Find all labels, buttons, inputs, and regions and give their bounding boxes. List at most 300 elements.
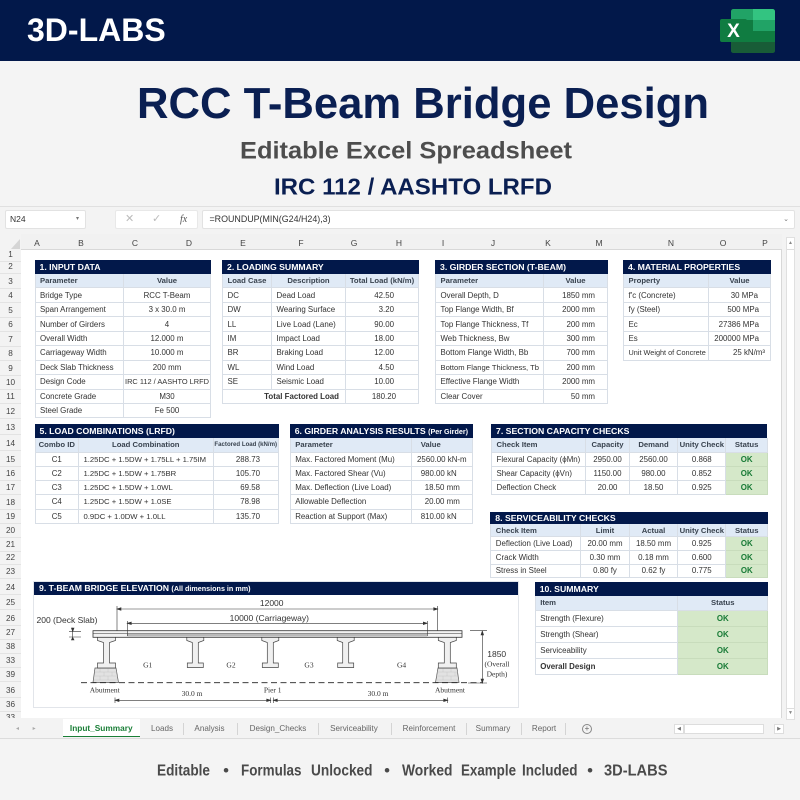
- load combinations table: 1.25DC + 1.5DW + 1.75LL + 1.75IM: [84, 455, 206, 464]
- panel: 1. input data: [35, 260, 211, 418]
- dimension labels: 12000: [260, 598, 284, 608]
- heading: 10. SUMMARY: [540, 584, 599, 594]
- capacity table: 18.50: [644, 483, 663, 492]
- formula text: ⌄: [783, 216, 789, 223]
- dimension labels: 1850: [487, 649, 506, 659]
- row headers: [0, 250, 21, 718]
- capacity table: Deflection Check: [496, 483, 556, 492]
- column headers: A: [34, 238, 40, 248]
- girder table: 50 mm: [571, 392, 595, 401]
- capacity table: Shear Capacity (ϕVn): [496, 469, 572, 478]
- row headers: 23: [6, 567, 15, 576]
- column headers: M: [595, 238, 603, 248]
- serviceability table: Deflection (Live Load): [496, 539, 573, 548]
- drawing annotations: 30.0 m: [368, 689, 389, 698]
- drawing annotations: Abutment: [90, 686, 121, 694]
- tab: Analysis: Analysis: [194, 724, 225, 733]
- footer tagline: •: [384, 762, 390, 780]
- deck slab: [93, 631, 462, 637]
- loading table: Impact Load: [276, 334, 320, 343]
- row headers: 7: [8, 334, 13, 344]
- column headers: [21, 234, 782, 250]
- load combinations table: C4: [52, 497, 62, 506]
- column headers: O: [720, 238, 726, 248]
- capacity table: 0.925: [692, 483, 712, 492]
- loading table: IM: [228, 334, 236, 343]
- column headers: P: [762, 238, 768, 248]
- formula text: =ROUNDUP(MIN(G24/H24),3): [210, 214, 331, 224]
- load combinations table: 69.58: [240, 483, 260, 492]
- heading: 4. MATERIAL PROPERTIES: [628, 262, 740, 272]
- heading: [490, 512, 768, 524]
- footer tagline: Formulas: [241, 762, 302, 780]
- input data table: M30: [159, 392, 175, 401]
- serviceability table: 18.50 mm: [636, 539, 671, 548]
- footer tagline: Editable: [157, 762, 210, 780]
- girder table: Bottom Flange Thickness, Tb: [440, 363, 539, 372]
- row headers: 8: [8, 349, 13, 358]
- girder table: Top Flange Thickness, Tf: [440, 320, 528, 329]
- footer tagline: Included: [522, 762, 578, 780]
- footer tagline: •: [223, 762, 229, 780]
- name box: N24: [10, 214, 26, 224]
- girder table: 1850 mm: [562, 291, 595, 300]
- title: RCC T-Beam Bridge Design: [137, 79, 709, 128]
- summary table: Strength (Flexure): [540, 614, 604, 623]
- capacity table: Flexural Capacity (ϕMn): [496, 455, 580, 464]
- panel: 9. bridge elevation: [34, 582, 518, 707]
- capacity table: Demand: [638, 440, 669, 449]
- worksheet area: [21, 250, 782, 718]
- material table: Value: [729, 276, 750, 285]
- loading table: DC: [228, 291, 239, 300]
- capacity table: 980.00: [641, 469, 666, 478]
- row headers: 6: [8, 320, 13, 329]
- heading: (All dimensions in mm): [171, 584, 250, 593]
- row headers: 24: [6, 583, 15, 592]
- girder table: Effective Flange Width: [440, 377, 519, 386]
- row headers: 36: [6, 700, 15, 709]
- loading table: WL: [228, 363, 239, 372]
- column headers: N: [668, 238, 674, 248]
- panel: 8. serviceability checks: [490, 512, 768, 578]
- footer tagline: 3D-LABS: [604, 762, 668, 780]
- logo: 3D-LABS: 3D-LABS: [27, 12, 166, 48]
- row headers: 26: [6, 614, 15, 623]
- formula bar: [5, 210, 795, 229]
- analysis table: [290, 438, 473, 524]
- input data table: 4: [165, 320, 169, 329]
- analysis table: Max. Factored Shear (Vu): [295, 469, 386, 478]
- material table: Es: [628, 334, 638, 343]
- dimension labels: 200 (Deck Slab): [37, 615, 98, 625]
- girder table: 200 mm: [566, 363, 595, 372]
- analysis table: 810.00 kN: [421, 512, 457, 521]
- drawing annotations: G4: [397, 660, 406, 670]
- heading: (Per Girder): [428, 427, 468, 436]
- load combinations table: 135.70: [236, 512, 260, 521]
- column headers: K: [545, 238, 551, 248]
- girder table: Web Thickness, Bw: [440, 334, 510, 343]
- loading table: 180.20: [372, 392, 396, 401]
- capacity table: 2950.00: [593, 455, 622, 464]
- summary table: Overall Design: [540, 662, 595, 671]
- serviceability table: 0.80 fy: [593, 566, 617, 575]
- vertical scrollbar: ▼: [788, 710, 793, 716]
- serviceability table: Check Item: [496, 526, 537, 535]
- input data table: 200 mm: [153, 363, 181, 372]
- girder table: Top Flange Width, Bf: [440, 305, 514, 314]
- capacity table: [491, 438, 767, 495]
- tab: Serviceability: Serviceability: [330, 724, 378, 733]
- formula text: [202, 210, 795, 229]
- panel: 4. material properties: [623, 260, 771, 361]
- horizontal scrollbar: ▶: [777, 726, 781, 732]
- drawing annotations: G1: [143, 660, 153, 670]
- drawing annotations: G2: [226, 660, 236, 670]
- serviceability table: 0.600: [692, 553, 712, 562]
- capacity table: OK: [741, 483, 753, 492]
- heading: 2. LOADING SUMMARY: [227, 262, 324, 272]
- load combinations table: Factored Load (kN/m): [214, 441, 277, 448]
- input data table: Number of Girders: [40, 320, 105, 329]
- tab: Loads: Loads: [151, 724, 173, 733]
- capacity table: Capacity: [591, 440, 624, 449]
- row headers: 3: [8, 276, 13, 286]
- analysis table: Parameter: [295, 440, 333, 449]
- girder table: Clear Cover: [440, 392, 483, 401]
- serviceability table: 0.775: [692, 566, 712, 575]
- input data table: Value: [157, 276, 177, 285]
- girder table: 200 mm: [566, 320, 595, 329]
- heading: 5. LOAD COMBINATIONS (LRFD): [40, 426, 175, 436]
- girder table: Parameter: [440, 276, 478, 285]
- dimension labels: [37, 598, 506, 659]
- spreadsheet window: [0, 206, 800, 739]
- abutments: [93, 668, 459, 682]
- dimension lines: [69, 606, 487, 703]
- heading: 7. SECTION CAPACITY CHECKS: [496, 426, 629, 436]
- loading table: Seismic Load: [276, 377, 324, 386]
- input data table: Fe 500: [155, 406, 179, 415]
- function buttons: ✓: [152, 213, 161, 225]
- row headers: 10: [6, 378, 15, 387]
- bridge elevation drawing: [36, 598, 510, 703]
- input data table: 10.000 m: [151, 348, 183, 357]
- load combinations table: Combo ID: [39, 440, 75, 449]
- input data table: Design Code: [40, 377, 86, 386]
- row headers: 14: [6, 439, 15, 448]
- loading table: Wearing Surface: [276, 305, 335, 314]
- capacity table: Unity Check: [680, 440, 724, 449]
- name box: ▾: [76, 216, 79, 222]
- analysis table: 18.50 mm: [425, 483, 460, 492]
- drawing annotations: G3: [304, 660, 314, 670]
- loading table: Total Factored Load: [264, 392, 339, 401]
- serviceability table: OK: [741, 566, 753, 575]
- heading: [222, 260, 419, 274]
- material table: 25 kN/m³: [733, 348, 765, 357]
- serviceability table: 0.62 fy: [642, 566, 665, 575]
- column headers: I: [442, 238, 444, 248]
- tab: Design_Checks: Design_Checks: [250, 724, 306, 733]
- row headers: 18: [6, 498, 15, 507]
- panel: 5. load combinations: [35, 424, 279, 524]
- material table: 200000 MPa: [714, 334, 759, 343]
- input data table: Span Arrangement: [40, 305, 106, 314]
- row headers: 5: [8, 306, 13, 314]
- load combinations table: [34, 438, 279, 524]
- column headers: B: [78, 238, 84, 248]
- load combinations table: 78.98: [240, 497, 260, 506]
- serviceability table: Actual: [642, 526, 665, 535]
- capacity table: 2560.00: [639, 455, 668, 464]
- sheet tab navigation arrows: ◂ ▸: [16, 726, 36, 732]
- drawing annotations: 30.0 m: [182, 689, 203, 698]
- analysis table: Value: [421, 440, 441, 449]
- input data table: Bridge Type: [40, 291, 82, 300]
- load combinations table: 1.25DC + 1.5DW + 1.0SE: [84, 497, 172, 506]
- loading table: BR: [228, 348, 238, 357]
- material table: [623, 274, 771, 361]
- capacity table: 0.868: [692, 455, 712, 464]
- loading table: SE: [228, 377, 238, 386]
- icon: Excel logo: X: [727, 21, 740, 42]
- row headers: 4: [8, 291, 13, 300]
- vertical scrollbar: ▲: [788, 240, 793, 246]
- analysis table: Max. Deflection (Live Load): [295, 483, 391, 492]
- input data table: Concrete Grade: [40, 392, 96, 401]
- serviceability table: OK: [741, 553, 753, 562]
- material table: Property: [628, 276, 660, 285]
- summary table: OK: [717, 630, 729, 639]
- input data table: Steel Grade: [40, 406, 82, 415]
- icon: add sheet: +: [585, 724, 589, 733]
- summary table: Serviceability: [540, 646, 587, 655]
- drawing annotations: Pier 1: [264, 686, 282, 694]
- input data table: Overall Width: [40, 334, 87, 343]
- input data table: Carriageway Width: [40, 348, 107, 357]
- material table: 30 MPa: [731, 291, 758, 300]
- column headers: E: [240, 238, 246, 248]
- tab: Reinforcement: Reinforcement: [403, 724, 455, 733]
- header band: [0, 0, 800, 61]
- heading: [623, 260, 771, 274]
- input data table: [34, 274, 211, 418]
- material table: f'c (Concrete): [628, 291, 676, 300]
- panel: 2. loading summary: [222, 260, 419, 404]
- icon: add sheet: [582, 724, 592, 734]
- row headers: 1: [8, 250, 13, 259]
- row headers: 2: [8, 262, 13, 271]
- input data table: 3 x 30.0 m: [149, 305, 185, 314]
- serviceability table: 0.925: [692, 539, 712, 548]
- row headers: 27: [6, 628, 15, 637]
- code line: IRC 112 / AASHTO LRFD: [274, 174, 552, 200]
- load combinations table: 105.70: [236, 469, 260, 478]
- heading: [34, 424, 279, 438]
- serviceability table: Status: [735, 526, 759, 535]
- drawing annotations: (Overall: [484, 660, 510, 668]
- heading: 8. SERVICEABILITY CHECKS: [495, 513, 616, 523]
- analysis table: 20.00 mm: [425, 497, 460, 506]
- drawing annotations: Abutment: [435, 686, 466, 694]
- heading: [290, 424, 473, 438]
- load combinations table: C3: [52, 483, 62, 492]
- ground line: [81, 682, 483, 684]
- load combinations table: 1.25DC + 1.5DW + 1.75BR: [84, 469, 176, 478]
- loading table: Braking Load: [276, 348, 323, 357]
- girder table: [435, 274, 608, 404]
- row headers: 13: [6, 423, 15, 432]
- analysis table: 2560.00 kN-m: [417, 455, 467, 464]
- loading table: DW: [228, 305, 241, 314]
- summary table: [535, 596, 768, 675]
- input data table: Deck Slab Thickness: [40, 363, 114, 372]
- material table: Unit Weight of Concrete: [628, 348, 706, 357]
- row headers: 20: [6, 526, 15, 535]
- capacity table: 1150.00: [594, 469, 621, 478]
- serviceability table: 0.18 mm: [638, 553, 669, 562]
- capacity table: 0.852: [692, 469, 712, 478]
- capacity table: OK: [741, 455, 753, 464]
- row headers: 16: [6, 469, 15, 478]
- row headers: 33: [6, 656, 15, 665]
- girder table: 300 mm: [566, 334, 595, 343]
- load combinations table: C2: [52, 469, 62, 478]
- column headers: H: [396, 238, 402, 248]
- serviceability table: Crack Width: [496, 553, 539, 562]
- heading: [435, 260, 608, 274]
- footer tagline: •: [587, 762, 593, 780]
- analysis table: Max. Factored Moment (Mu): [295, 455, 395, 464]
- loading table: LL: [228, 320, 236, 329]
- horizontal scrollbar: [674, 724, 784, 734]
- active tab: Input_Summary: [70, 723, 133, 733]
- row headers: 22: [6, 553, 15, 562]
- heading: 3. GIRDER SECTION (T-BEAM): [440, 262, 566, 272]
- load combinations table: 1.25DC + 1.5DW + 1.0WL: [84, 483, 173, 492]
- serviceability table: 0.30 mm: [590, 553, 620, 562]
- horizontal scrollbar: ◀: [677, 726, 681, 732]
- heading: [34, 582, 518, 595]
- serviceability table: 20.00 mm: [587, 539, 623, 548]
- girder table: 2000 mm: [562, 305, 595, 314]
- row headers: 38: [6, 642, 15, 651]
- loading table: Live Load (Lane): [276, 320, 336, 329]
- girder table: Bottom Flange Width, Bb: [440, 348, 528, 357]
- summary table: Strength (Shear): [540, 630, 599, 639]
- footer tagline: Example: [461, 762, 516, 780]
- load combinations table: 288.73: [236, 455, 260, 464]
- capacity table: 20.00: [598, 483, 617, 492]
- heading: [491, 424, 767, 438]
- drawing annotations: Depth): [487, 670, 508, 678]
- panel: 7. section capacity checks: [491, 424, 768, 495]
- loading table: Load Case: [228, 276, 266, 285]
- loading table: 42.50: [374, 291, 394, 300]
- girder table: Overall Depth, D: [440, 291, 499, 300]
- load combinations table: Load Combination: [112, 440, 179, 449]
- footer tagline: [157, 762, 668, 780]
- loading table: Description: [287, 276, 330, 285]
- analysis table: Reaction at Support (Max): [295, 512, 387, 521]
- heading: 6. GIRDER ANALYSIS RESULTS: [295, 426, 426, 436]
- function buttons: [115, 210, 198, 229]
- serviceability table: [490, 524, 768, 578]
- function buttons: fx: [180, 214, 187, 225]
- row headers: 11: [6, 392, 15, 401]
- analysis table: 980.00 kN: [421, 469, 457, 478]
- name box: [5, 210, 86, 229]
- heading: [535, 582, 768, 596]
- input data table: Parameter: [40, 276, 78, 285]
- panel: 3. girder section: [435, 260, 608, 404]
- column headers: J: [491, 238, 495, 248]
- row headers: 15: [6, 455, 15, 464]
- tab: Summary: Summary: [476, 724, 510, 733]
- summary table: Item: [540, 598, 556, 607]
- footer tagline: Unlocked: [311, 762, 372, 780]
- loading table: 10.00: [374, 377, 394, 386]
- loading table: Dead Load: [276, 291, 315, 300]
- loading table: 3.20: [379, 305, 394, 314]
- serviceability table: OK: [741, 539, 753, 548]
- tab: Report: Report: [532, 724, 556, 733]
- summary table: OK: [717, 614, 729, 623]
- loading table: 12.00: [374, 348, 394, 357]
- loading table: 90.00: [374, 320, 394, 329]
- heading: 1. INPUT DATA: [40, 262, 100, 272]
- row headers: 36: [6, 686, 15, 695]
- column headers: G: [351, 238, 357, 248]
- loading table: 4.50: [379, 363, 394, 372]
- material table: 500 MPa: [727, 305, 759, 314]
- footer tagline: Worked: [402, 762, 452, 780]
- title block: [137, 79, 709, 200]
- serviceability table: Limit: [596, 526, 614, 535]
- subtitle: Editable Excel Spreadsheet: [240, 138, 572, 164]
- heading: 9. T-BEAM BRIDGE ELEVATION: [39, 583, 169, 593]
- capacity table: Status: [735, 440, 758, 449]
- vertical scrollbar: [786, 237, 795, 720]
- serviceability table: Stress in Steel: [496, 566, 547, 575]
- material table: 27386 MPa: [719, 320, 759, 329]
- heading: [34, 260, 211, 274]
- girder table: 2000 mm: [562, 377, 595, 386]
- drawing annotations: [90, 660, 509, 698]
- loading table: 18.00: [374, 334, 394, 343]
- girder table: 700 mm: [566, 348, 595, 357]
- loading table: Total Load (kN/m): [350, 276, 414, 285]
- row headers: 9: [8, 364, 13, 372]
- load combinations table: C5: [52, 512, 62, 521]
- icon: Excel logo: [720, 9, 775, 53]
- load combinations table: C1: [52, 455, 62, 464]
- girders: [98, 637, 456, 668]
- active tab: [63, 719, 140, 737]
- column headers: C: [132, 238, 138, 248]
- function buttons: ✕: [125, 213, 134, 225]
- panel: 10. summary: [535, 582, 768, 675]
- summary table: OK: [717, 662, 729, 671]
- capacity table: OK: [741, 469, 753, 478]
- material table: fy (Steel): [628, 305, 660, 314]
- row headers: 17: [6, 483, 15, 492]
- load combinations table: 0.9DC + 1.0DW + 1.0LL: [84, 512, 166, 521]
- girder table: Value: [565, 276, 586, 285]
- loading table: [222, 274, 419, 404]
